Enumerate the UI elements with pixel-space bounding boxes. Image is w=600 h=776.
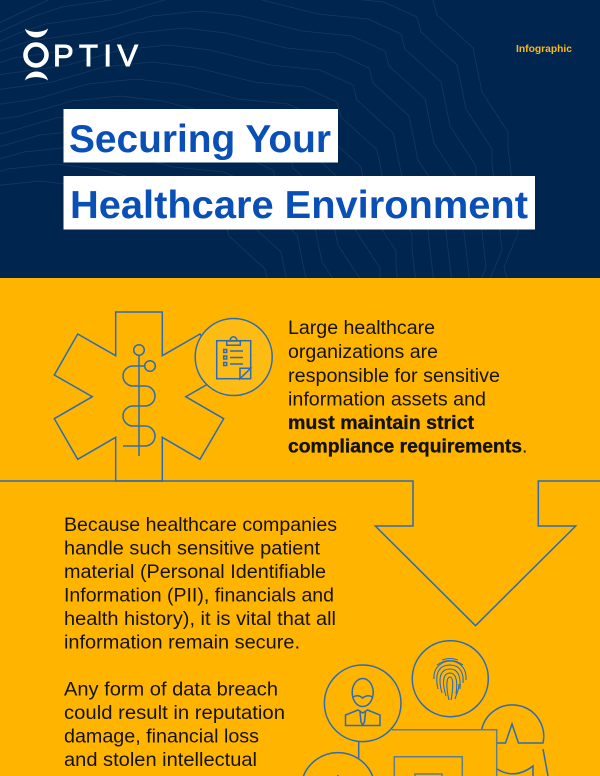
- intro text: compliance requirements: [288, 436, 522, 458]
- body text: sensitive patient material: material (Personal Identifiable: [64, 561, 326, 583]
- icon: connector and lower circle: [303, 741, 373, 776]
- title: Healthcare Environment: [70, 184, 528, 227]
- intro text: [288, 317, 527, 458]
- body text: data breach: Any form of data breach: [64, 678, 278, 700]
- body text: data breach: damage, financial loss: [64, 726, 259, 748]
- intro text: must maintain strict: [288, 412, 474, 434]
- body text: data breach: could result in reputation: [64, 702, 285, 724]
- icon: person with beard in circle: [324, 665, 401, 742]
- icon: central device panel: [392, 730, 497, 776]
- icon: clipboard checklist in circle: [195, 318, 272, 396]
- logo: Optiv: PTIV: [53, 38, 138, 73]
- body text: sensitive patient material: Because healthcare companies: [64, 514, 337, 536]
- body text: sensitive patient material: health history), it is vital that all: [64, 608, 336, 630]
- body text: sensitive patient material: Information (PII), financials and: [64, 584, 334, 606]
- icon: star of life with caduceus: [54, 312, 224, 481]
- title: [64, 109, 535, 230]
- icon: warning shape right: [482, 705, 548, 776]
- body text: data breach: [64, 678, 285, 771]
- body text: sensitive patient material: [64, 514, 337, 654]
- intro text: information assets and: [288, 389, 486, 411]
- label: Infographic: Infographic: [516, 43, 572, 55]
- logo: Optiv: [25, 28, 138, 80]
- intro text: .: [522, 436, 527, 458]
- intro text: responsible for sensitive: [288, 365, 500, 387]
- header band: [0, 0, 600, 278]
- body text: data breach: and stolen intellectual: [64, 749, 257, 771]
- icon: fingerprint in circle: [412, 641, 488, 717]
- body text: sensitive patient material: information remain secure.: [64, 632, 300, 654]
- body text: sensitive patient material: handle such sensitive patient: [64, 538, 321, 560]
- title: Securing Your: [69, 118, 331, 161]
- intro text: organizations are: [288, 341, 438, 363]
- intro text: Large healthcare: [288, 317, 435, 339]
- yellow content panel: [0, 278, 600, 776]
- arrow: divider line forming down arrow: [0, 481, 600, 626]
